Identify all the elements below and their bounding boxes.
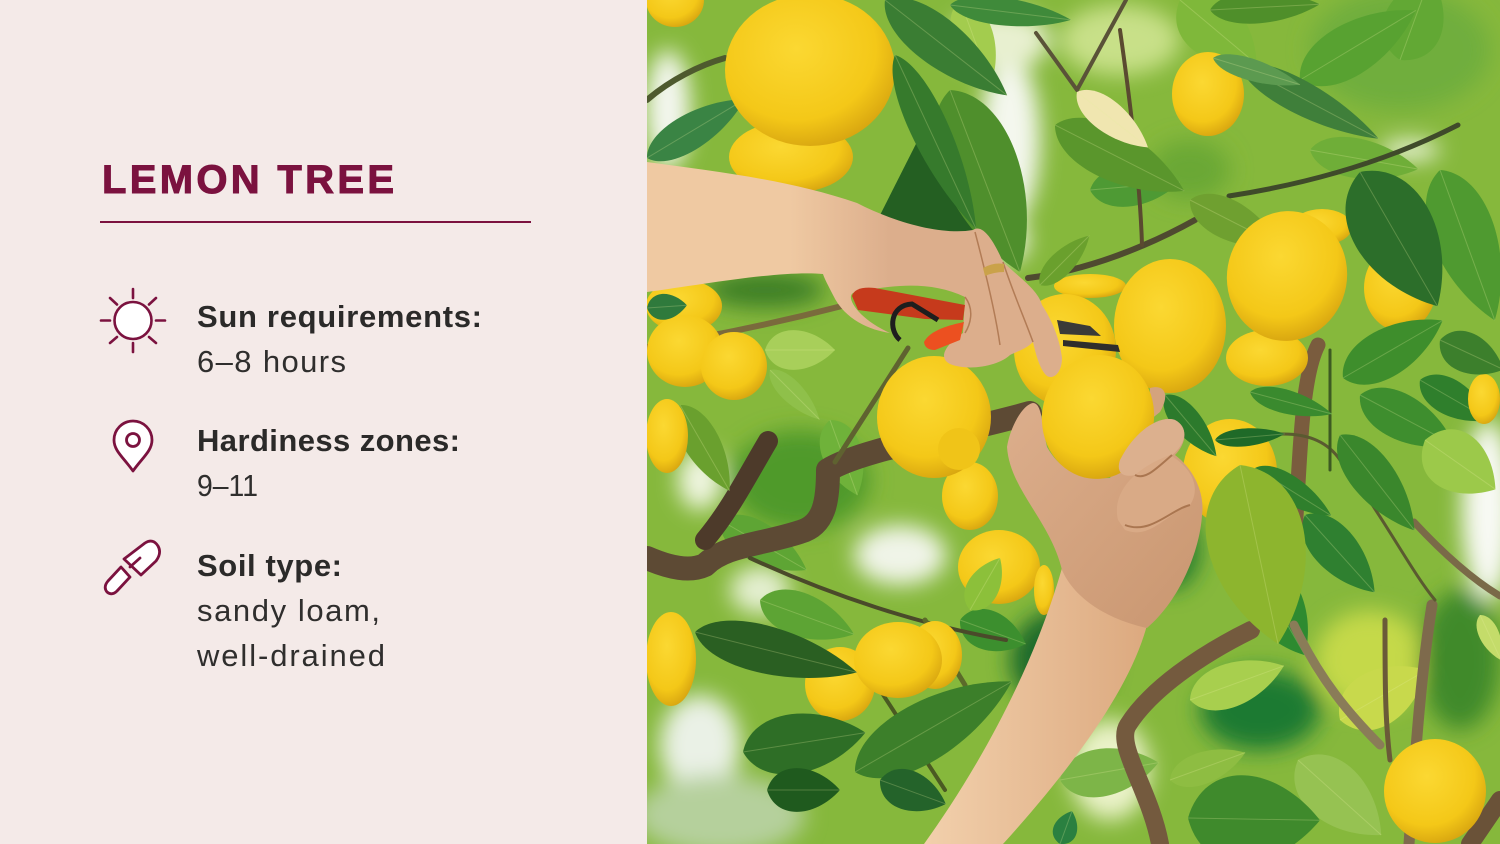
icon: location pin [114,421,152,471]
panel: text background [0,0,647,844]
icon: sun [101,289,165,352]
tree leaves: front layer [689,47,1473,844]
finger lines on upper hand [965,232,1033,345]
lower arm [924,568,1147,844]
tree leaves: mid layer [638,0,1500,844]
branches [647,0,1500,844]
text: soil type: well-drained [196,638,385,673]
text: hardiness zones: Hardiness zones: [197,423,460,458]
background small leaves [710,0,1500,803]
upper arm and hand [647,162,1062,377]
pruning shears [852,264,1120,352]
text: soil type: sandy loam, [197,593,380,628]
background lemons [646,0,1500,721]
lower hand palm and thumb [1007,403,1203,628]
text: soil type: Soil type: [197,548,342,583]
text: hardiness zones: 9–11 [197,468,258,503]
text: sun requirements: 6–8 hours [197,344,346,379]
text: sun requirements [197,299,482,379]
photo: hands pruning a lemon tree [635,0,1500,844]
finger behind lemon [1150,387,1165,420]
gripping fingers [1117,419,1195,532]
text: hardiness zones [197,423,460,503]
title divider [100,221,531,223]
front lemons [646,0,1486,843]
held lemon [1042,356,1154,479]
blurred foliage backdrop [635,0,1500,844]
icon: garden trowel [105,541,160,594]
text: soil type [196,548,385,673]
text: sun requirements: Sun requirements: [197,299,482,334]
title: LEMON TREE [102,158,394,202]
